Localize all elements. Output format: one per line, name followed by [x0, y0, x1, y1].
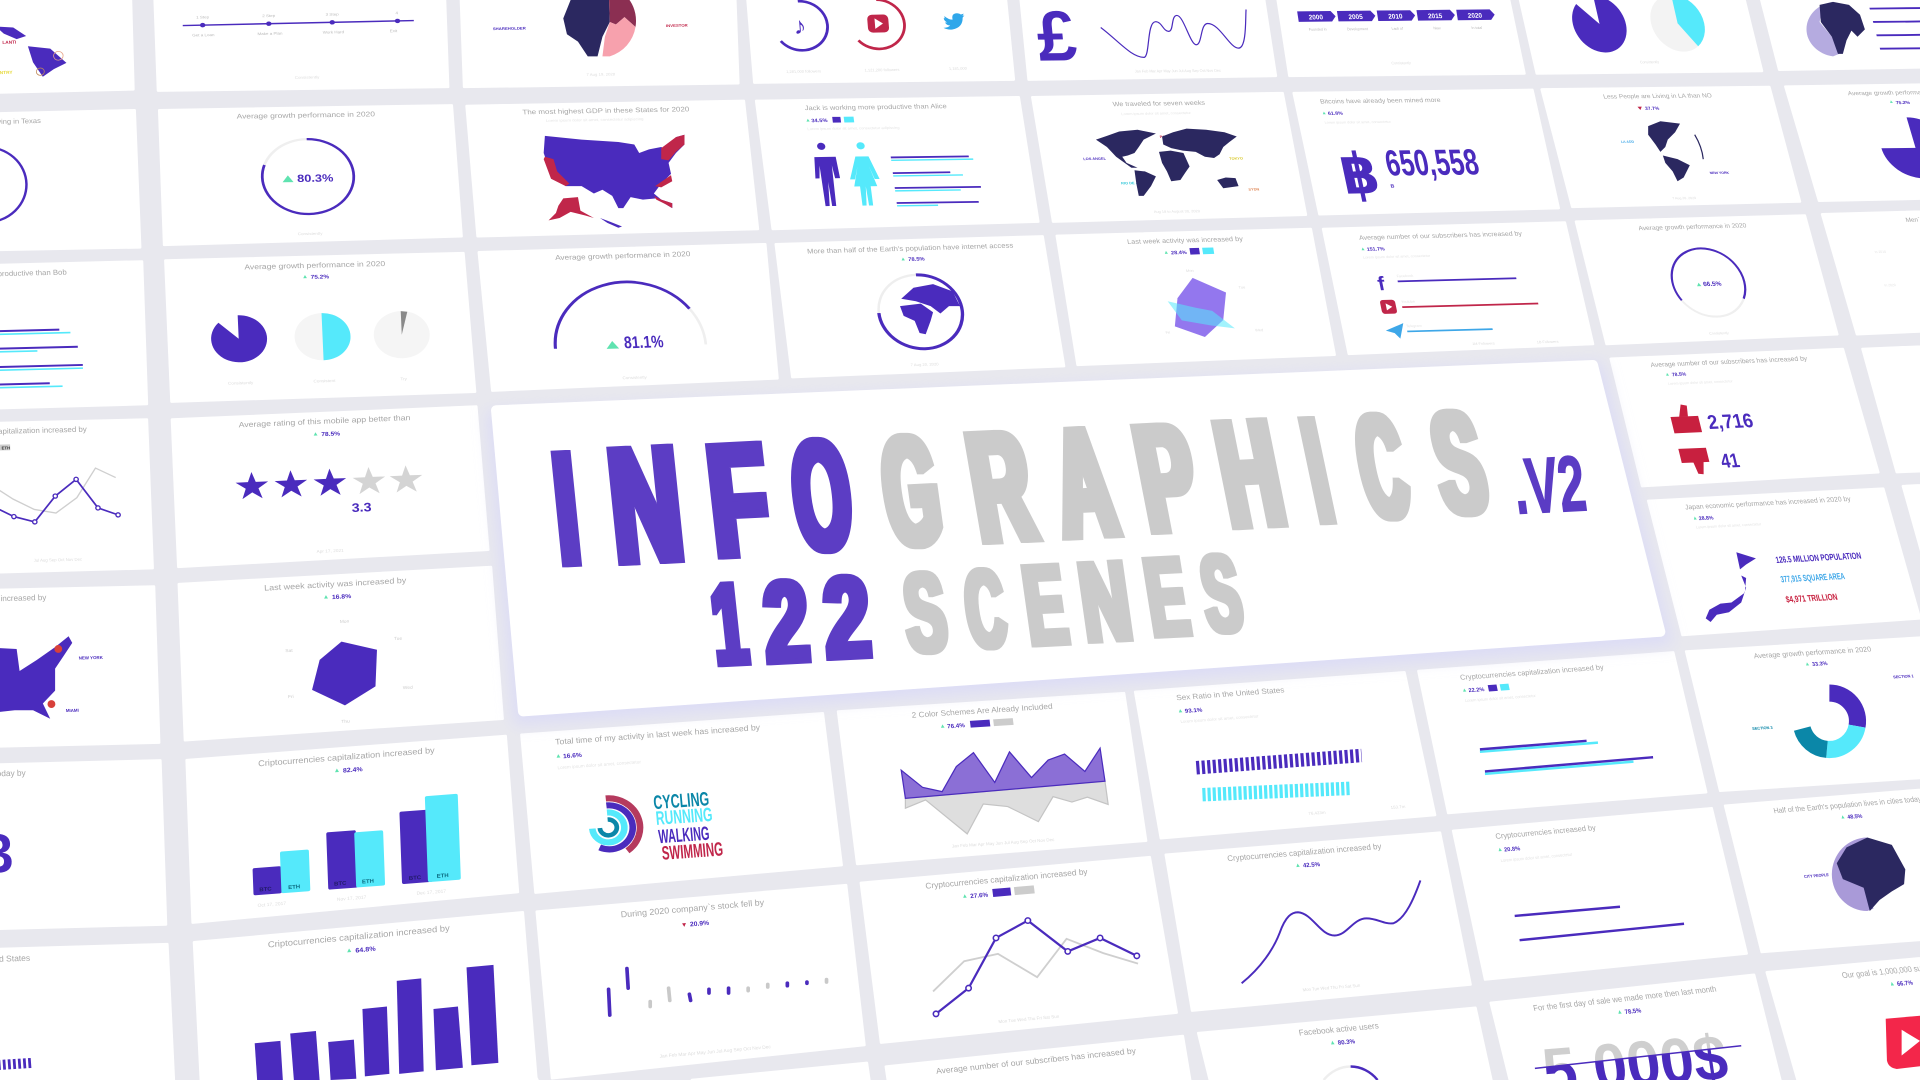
panel: crypto increased bars: 20.8% [1504, 846, 1521, 854]
panel: radar chart: Mon [1186, 269, 1194, 273]
chart: split globe [563, 0, 636, 56]
panel: stock fell chart: Jan Feb Mar Apr May Jun Jul Aug Sep Oct Nov Dec [659, 1044, 772, 1060]
panel: growth circle 80.3%: 80.3% [297, 172, 334, 185]
panel: hexagon radar: Sat [285, 648, 293, 653]
panel: growth circle 66.5%: 66.5% [1702, 281, 1723, 288]
panel: year arrows timeline: Founded in [1309, 27, 1327, 32]
panel: hexagon radar: Fri [288, 694, 294, 699]
panel: thumbs likes: 78.5% [1671, 372, 1688, 378]
panel: crypto grouped bars: Nov 17, 2017 [337, 895, 367, 903]
panel: thumbs likes [1611, 349, 1878, 486]
panel: Bob bars [0, 261, 147, 411]
panel: step timeline: 3 Step [326, 12, 340, 17]
panel: 5000 dollars sale [1491, 975, 1780, 1080]
panel: radar chart: 28.4% [1171, 250, 1188, 256]
title: version V2: .V2 [1507, 439, 1591, 530]
title: SCENES: N [1072, 537, 1138, 665]
panel: two color area chart: Jan Feb Mar Apr May Jun Jul Aug Sep Oct Nov Dec [952, 837, 1055, 849]
title: SCENES: C [958, 547, 1012, 672]
map: Americas globe [1648, 121, 1703, 181]
panel: shareholder globe: 7 Aug 19, 2020 [586, 72, 616, 77]
panel: crypto grouped bars: ETH [362, 879, 374, 885]
icon: youtube [1886, 1014, 1920, 1069]
title: 122: 2 [820, 553, 874, 684]
panel: crypto grouped bars: Oct 17, 2017 [258, 901, 287, 909]
chart: candlestick bars [609, 969, 827, 1015]
panel: bitcoin mined: B [1390, 184, 1395, 190]
panel: average subscribers bottom [886, 1036, 1190, 1080]
chart: two tone globe [1806, 2, 1865, 56]
panel: pound line chart: Jan Feb Mar Apr May Jun Jul Aug Sep Oct Nov Dec [1135, 69, 1221, 74]
panel: three pies: 75.2% [311, 275, 330, 281]
panel: earth internet access: 78.5% [908, 257, 925, 263]
panel: pound line chart [1015, 0, 1276, 80]
panel: year arrows timeline: 2005 [1348, 14, 1364, 21]
panel: men determined [1822, 208, 1920, 334]
panel: Japan economy [1648, 489, 1920, 635]
panel: left small 3 [0, 760, 166, 932]
panel: pie right: 75.2% [1895, 100, 1912, 106]
panel: radar chart: Fri [1165, 331, 1171, 335]
panel: sex ratio people: 76,423m [1308, 810, 1326, 816]
panel: stock fell chart: During 2020 company`s stock fell by [620, 897, 765, 919]
panel: LA population globe: LA ADD [1620, 140, 1635, 144]
title: SCENES: E [1137, 534, 1196, 660]
panel: bitcoin mined: ฿ [1334, 142, 1385, 208]
panel: crypto grouped bars: 82.4% [343, 766, 363, 774]
panel: shareholder globe: INVESTOR [666, 23, 688, 28]
panel: crypto grouped bars: Dec 17, 2017 [416, 889, 447, 897]
title: GRAPHICS: I [1292, 388, 1343, 554]
panel: hexagon radar: Last week activity was increased by [264, 575, 407, 593]
icon: thumb down [1678, 448, 1712, 475]
title: 122: 1 [706, 560, 752, 690]
panel: crypto line chart left: Jul Aug Sep Oct Nov Dec [34, 557, 82, 563]
panel: half earth cities [1725, 786, 1920, 952]
title: INFO: O [784, 407, 860, 583]
panel: bitcoin mined [1294, 90, 1559, 214]
panel: subscribers bars: Lorem ipsum dolor sit amet, consectetur [1363, 254, 1431, 260]
panel: bitcoin mined: Bitcoins have already been mined more [1320, 97, 1442, 105]
panel: East US map: NEW YORK [79, 655, 104, 660]
panel: social networks [743, 0, 1014, 83]
panel: gauge 81.1%: Average growth performance in 2020 [555, 250, 691, 262]
panel: growth circle 66.5%: Consistently [1709, 331, 1729, 336]
panel: growth circle 66.5% [1576, 216, 1837, 344]
panel: radar chart [1057, 229, 1335, 365]
panel: donut chart: Average growth performance in 2020 [1753, 645, 1872, 660]
panel: crypto bars horizontal: Lorem ipsum dolor sit amet, consectetur [1465, 693, 1537, 703]
panel: crypto line chart left [0, 420, 153, 576]
panel: cycling rings: RUNNING [655, 804, 713, 830]
panel: hero shadow [487, 362, 1673, 725]
panel: radar chart: Tue [1238, 286, 1246, 290]
panel: year arrows timeline: 2000 [1308, 14, 1324, 22]
panel: world travel map: SYDN [1248, 188, 1260, 192]
panel: two pies [1506, 0, 1762, 73]
panel: year arrows timeline: New [1433, 26, 1441, 30]
panel: year arrows timeline: 2010 [1388, 13, 1403, 21]
panel: sex ratio people: 153.7m [1390, 804, 1406, 810]
panel: growth circle 80.3%: Consistently [298, 231, 324, 236]
panel: Japan economy: 28.8% [1698, 515, 1715, 522]
panel: Facebook active users: Facebook active users [1298, 1021, 1379, 1038]
title: SCENES: E [1017, 542, 1074, 670]
panel: crypto curve [1166, 833, 1471, 1011]
panel: crypto bars horizontal: Cryptocurrencies capitalization increased by [1459, 663, 1605, 682]
panel: world travel map [1032, 93, 1306, 222]
panel: crypto grouped bars: BTC [259, 887, 272, 893]
panel: step timeline: Make a Plan [257, 31, 283, 36]
panel: three pies: Consistently [228, 380, 254, 386]
panel: goal subscribers: 66.7% [1896, 980, 1914, 988]
panel: subscribers bars: Telegram [1406, 324, 1422, 328]
map: United States [544, 135, 684, 228]
panel: hexagon radar [179, 567, 503, 740]
panel: cycling rings: 16.6% [563, 752, 582, 760]
panel: crypto increased bars: Lorem ipsum dolor sit amet, consectetur [1500, 852, 1573, 863]
panel: thumbs likes: 2,716 [1705, 411, 1756, 434]
panel: crypto column chart [194, 912, 538, 1080]
panel: cycling rings: CYCLING [653, 789, 710, 814]
panel: year arrows timeline: Consistently [1391, 61, 1411, 65]
title: GRAPHICS: C [1344, 384, 1419, 549]
title: GRAPHICS: R [957, 401, 1045, 575]
panel: subscribers bars: 1M Followers [1472, 342, 1495, 346]
panel: shareholder globe [459, 0, 738, 87]
panel: Facebook active users: 80.3% [1337, 1038, 1356, 1047]
panel: social networks: 1,281,000 followers [786, 69, 821, 74]
panel: step timeline: 4 [395, 11, 399, 15]
panel: hexagon radar: Wed [403, 685, 413, 690]
title: INFO [547, 407, 860, 598]
panel: LA population globe: 7 Aug 20, 2020 [1672, 196, 1697, 200]
panel: crypto dual line chart: Mon Tue Wed Thu Fri Sat Sun [998, 1014, 1060, 1024]
panel: people productivity [756, 97, 1038, 229]
panel: social networks: 1,121,200 followers [864, 67, 900, 72]
panel: crypto curve: 42.5% [1303, 861, 1321, 869]
panel: social networks: ♪ [792, 13, 807, 40]
panel: men determined: In 2010 [1874, 250, 1887, 254]
title: 122: 2 [760, 557, 813, 687]
panel: two color area chart [838, 693, 1146, 864]
panel: step timeline: Work Hard [323, 30, 345, 35]
title: GRAPHICS [873, 383, 1498, 579]
panel: stock fell chart [537, 885, 864, 1078]
panel: crypto column chart: Criptocurrencies capitalization increased by [268, 923, 451, 949]
panel: men determined: In 2020 [1884, 283, 1896, 287]
panel: subscribers bars: f [1375, 273, 1387, 295]
panel: subscribers bars [1323, 222, 1593, 354]
icon: twitter bird [942, 13, 966, 30]
panel: world travel map: LOS ANGEL [1083, 157, 1107, 161]
panel: half earth cities: Half of the Earth's population lives in cities today [1772, 794, 1920, 815]
map: earth land [900, 284, 960, 334]
panel: globe list [1745, 0, 1920, 70]
panel: step timeline: Exit [390, 28, 398, 33]
panel: crypto line chart left: ETH [1, 445, 10, 451]
panel: hero title card [496, 365, 1660, 711]
panel: cycling rings [521, 713, 842, 893]
panel: crypto dual line chart [861, 857, 1177, 1043]
panel: US GDP map: The most highest GDP in these States for 2020 [522, 105, 690, 116]
panel: year arrows timeline: In total [1471, 26, 1483, 30]
panel: thumbs likes: Lorem ipsum dolor sit amet, consectetur [1668, 379, 1734, 386]
panel: earth internet access: 7 Aug 20, 2020 [910, 362, 940, 367]
chart: column bars [255, 965, 498, 1080]
panel: sex ratio people: 93.1% [1185, 708, 1204, 715]
panel: two color area chart: 76.4% [947, 722, 966, 730]
icon: man [811, 143, 844, 206]
panel: Japan economy: $4,971 TRILLION [1785, 592, 1839, 604]
panel: year arrows timeline: 2020 [1467, 13, 1483, 20]
panel: Japan economy: Japan economic performance has increased in 2020 by [1684, 496, 1852, 511]
panel: subscribers bars: 1B Followers [1536, 340, 1559, 344]
panel: year arrows timeline: 2015 [1428, 13, 1443, 20]
panel: three pies [165, 253, 475, 402]
panel: sex ratio people: Sex Ratio in the United States [1176, 686, 1285, 702]
title: GRAPHICS: H [1204, 389, 1295, 559]
title: GRAPHICS: S [1421, 383, 1498, 545]
panel: world travel map: Aug 18 to August 30, 2020 [1154, 209, 1200, 214]
panel: year arrows timeline: Lack of [1391, 27, 1404, 31]
panel: subscribers bottom [692, 1063, 869, 1080]
panel: star rating: 3.3 [351, 500, 372, 515]
panel: Japan economy: 126.5 MILLION POPULATION [1774, 551, 1862, 565]
panel: stock fell chart: 20.9% [690, 920, 710, 928]
icon: thumb up [1668, 404, 1702, 433]
icon: woman [845, 142, 883, 206]
panel: star rating: Average rating of this mobile app better than [238, 414, 411, 429]
panel: radar chart: Wed [1255, 328, 1264, 332]
panel: donut chart: 33.3% [1812, 661, 1828, 668]
panel: gauge 81.1%: Consistently [622, 375, 648, 380]
panel: world travel map: PARIS [1159, 135, 1172, 139]
panel: step timeline: Get a Loan [192, 32, 215, 37]
panel: people productivity: Jack is working more productive than Alice [804, 103, 947, 112]
panel: 5000 dollars sale: 78.5% [1624, 1007, 1643, 1016]
chart: activity rings [590, 796, 642, 853]
panel: average subscribers bottom: Average number of our subscribers has increased by [935, 1045, 1137, 1076]
panel: donut chart: SECTION 1 [1893, 673, 1915, 679]
panel: crypto bars horizontal [1418, 652, 1706, 813]
chart: cyan people row [1202, 788, 1351, 795]
panel: step timeline: 2 Step [262, 13, 276, 18]
panel: LA population globe: 37.7% [1644, 106, 1661, 112]
title: GRAPHICS: A [1041, 396, 1127, 569]
panel: social networks: 1,181,000 [949, 66, 967, 71]
panel: crypto grouped bars: BTC [409, 875, 421, 882]
panel: world travel map: TOKYO [1229, 157, 1243, 161]
title: INFO: N [602, 414, 690, 597]
panel: world travel map: We traveled for seven weeks [1112, 100, 1206, 108]
panel: hexagon radar: Thu [341, 719, 350, 724]
panel: far right small [1862, 339, 1920, 472]
panel: US GDP map [467, 101, 758, 236]
panel: sex ratio people [1135, 672, 1435, 838]
panel: thumbs likes: Average number of our subscribers has increased by [1650, 356, 1809, 369]
panel: donut chart: SECTION 3 [1752, 725, 1774, 731]
title: GRAPHICS: P [1123, 392, 1210, 563]
panel: people productivity: Lorem ipsum dolor sit amet, consectetur adipiscing [807, 126, 900, 131]
panel: star rating: Apr 17, 2021 [316, 548, 344, 554]
panel: US people left [0, 944, 174, 1080]
panel: crypto grouped bars: ETH [288, 884, 300, 891]
panel: crypto grouped bars: BTC [334, 881, 346, 888]
panel: earth internet access: More than half of the Earth's population have internet access [807, 241, 1014, 255]
panel: world travel map: Lorem ipsum dolor sit amet, consectetur [1121, 111, 1192, 116]
title: SCENES: S [1194, 533, 1250, 656]
chart: purple people row [1196, 756, 1362, 768]
panel: hexagon radar: Mon [340, 619, 350, 624]
panel: Facebook active users [1198, 1008, 1491, 1080]
panel: star rating: 78.5% [321, 431, 341, 438]
panel: cycling rings: Total time of my activity in last week has increased by [555, 722, 761, 747]
panel: crypto grouped bars: Criptocurrencies capitalization increased by [258, 745, 435, 768]
panel: growth circle 80.3%: Average growth performance in 2020 [237, 110, 375, 120]
panel: gauge 81.1%: 81.1% [623, 332, 664, 352]
panel: cycling rings: WALKING [658, 823, 710, 848]
panel: LA population globe [1542, 87, 1800, 207]
panel: US GDP map: Lorem ipsum dolor sit amet, consectetur adipiscing [546, 117, 644, 123]
panel: subscribers bars: Youtube [1401, 300, 1415, 304]
panel: crypto dual line chart: 27.6% [970, 892, 989, 900]
panel: pie right [1785, 83, 1920, 201]
panel: gauge 81.1% [479, 244, 778, 391]
map: Japan [1706, 552, 1756, 622]
map: world [1096, 129, 1239, 196]
panel: Texas ring [0, 110, 140, 252]
panel: Hawaii map: LANTI [2, 40, 16, 45]
panel: goal subscribers [1767, 949, 1920, 1080]
panel: crypto curve: Cryptocurrencies capitalization increased by [1227, 842, 1382, 863]
panel: star rating [172, 407, 488, 567]
panel: year arrows timeline: Development [1347, 27, 1368, 31]
panel: crypto grouped bars: ETH [437, 873, 449, 880]
panel: three pies: Average growth performance in 2020 [244, 260, 386, 271]
panel: two pies: Consistently [1640, 60, 1660, 64]
panel: crypto column chart: 64.8% [355, 946, 376, 954]
panel: two color area chart: 2 Color Schemes Are Already Included [911, 702, 1053, 720]
panel: growth circle 80.3% [159, 105, 462, 245]
title: INFO: F [700, 410, 777, 590]
panel: people productivity: 34.5% [811, 118, 828, 124]
panel: LA population globe: Less People are Living in LA than NO [1603, 93, 1713, 100]
panel: crypto bars horizontal: 22.2% [1468, 687, 1485, 694]
chart: earth globe [1832, 838, 1905, 911]
panel: half earth cities: 48.5% [1847, 814, 1863, 821]
panel: bitcoin mined: Lorem ipsum dolor sit amet, consectetur [1324, 120, 1392, 125]
panel: three pies: Try [400, 376, 408, 381]
panel: donut chart [1686, 637, 1920, 791]
panel: cycling rings: SWIMMING [661, 839, 724, 865]
panel: thumbs likes: 41 [1719, 450, 1742, 473]
panel: hexagon radar: 16.8% [332, 593, 352, 601]
panel: three pies: Consistent [313, 378, 336, 383]
panel: Hawaii map [0, 0, 133, 96]
panel: East US map: MIAMI [66, 708, 79, 713]
panel: crypto curve: Mon Tue Wed Thu Fri Sat Sun [1302, 983, 1361, 992]
panel: crypto increased bars: Cryptocurrencies increased by [1494, 823, 1597, 841]
panel: world travel map: RIO DE J [1121, 181, 1138, 185]
title: INFO: I [547, 421, 586, 598]
panel: East US map [0, 587, 159, 749]
map: eastern US [0, 636, 72, 719]
panel: crypto increased bars [1453, 808, 1747, 980]
panel: 5000 dollars sale: For the first day of sale we made more then last month [1532, 984, 1717, 1013]
title: GRAPHICS: G [873, 404, 950, 579]
panel: half earth cities: CITY PEOPLE [1803, 872, 1830, 879]
panel: cycling rings: Lorem ipsum dolor sit amet, consectetur [557, 759, 642, 770]
panel: step timeline [153, 0, 448, 91]
panel: step timeline: Consistently [295, 75, 320, 80]
panel: crypto dual line chart: Cryptocurrencies capitalization increased by [925, 867, 1089, 891]
panel: step timeline: 1 Step [196, 15, 210, 19]
panel: subscribers bars: Facebook [1396, 274, 1414, 278]
panel: earth internet access [776, 236, 1064, 377]
panel: hexagon radar: Tue [394, 636, 403, 641]
panel: sex ratio people: Lorem ipsum dolor sit amet, consectetur [1180, 713, 1260, 724]
panel: LA population globe: NEW YORK [1709, 171, 1730, 175]
panel: subscribers bars: Average number of our subscribers has increased by [1359, 231, 1523, 242]
title: SCENES: S [898, 550, 952, 677]
panel: subscribers bars: 151.7% [1366, 247, 1386, 253]
panel: growth circle 66.5%: Average growth performance in 2020 [1638, 223, 1748, 232]
title: SCENES [898, 533, 1250, 677]
panel: Japan economy: Lorem ipsum dolor sit amet, consectetur [1695, 522, 1762, 530]
panel: shareholder globe: SHAREHOLDER [493, 26, 526, 31]
panel: crypto grouped bars [187, 736, 518, 923]
panel: right edge small [1903, 474, 1920, 621]
panel: bitcoin mined: 61.8% [1327, 111, 1344, 117]
panel: bitcoin mined: 650,558 [1381, 142, 1483, 184]
panel: radar chart: Last week activity was increased by [1127, 236, 1244, 246]
panel: year arrows timeline [1269, 0, 1524, 76]
title: 122 [706, 553, 874, 690]
panel: Japan economy: 377,915 SQUARE AREA [1779, 571, 1846, 584]
